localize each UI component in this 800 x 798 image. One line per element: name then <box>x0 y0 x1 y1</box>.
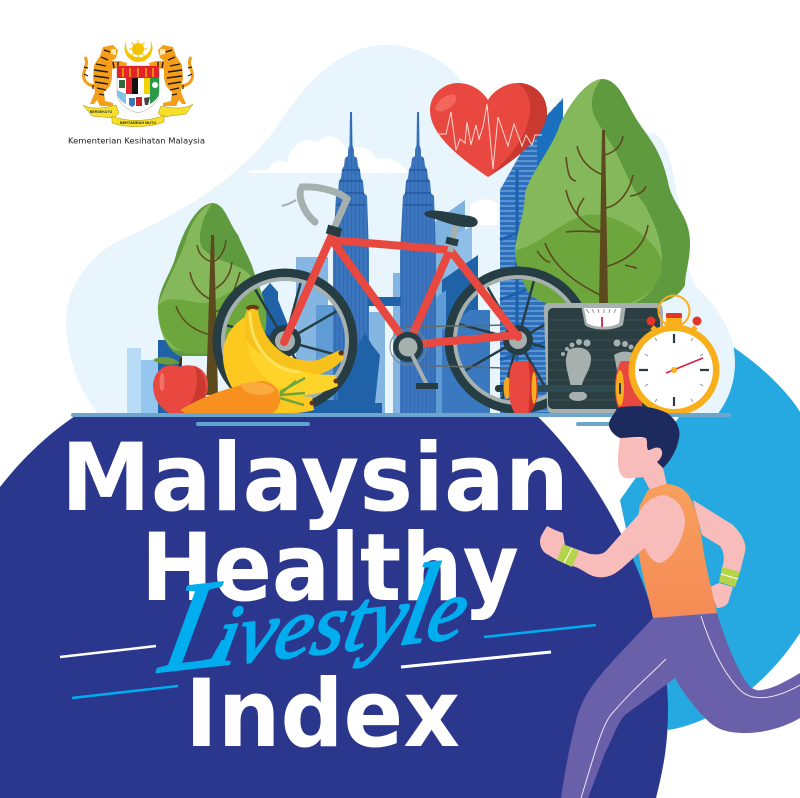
title: Healthy: Healthy <box>141 514 519 623</box>
front arm and hand <box>540 495 685 577</box>
stopwatch <box>628 296 720 416</box>
back arm <box>693 500 746 572</box>
left footprint <box>561 339 591 401</box>
rear wheel <box>443 265 593 415</box>
speed line white left <box>60 646 156 657</box>
neck and face <box>618 438 667 490</box>
title: Livestyle script: Livestyle <box>150 523 484 700</box>
front wheel <box>212 268 358 414</box>
background: pale blue blob <box>66 45 735 415</box>
Petronas tower left <box>333 112 369 413</box>
crest: motto ribbon <box>83 104 193 127</box>
navy title panel <box>0 416 668 798</box>
front wristband <box>557 544 579 567</box>
crank and pedal <box>390 329 438 389</box>
logo: Malaysian coat of arms with ministry name <box>68 40 205 146</box>
saddle <box>424 211 478 252</box>
title: Index: Index <box>185 660 460 769</box>
historic domed building <box>158 283 382 414</box>
trousers <box>561 613 800 798</box>
runner <box>540 406 800 798</box>
right footprint <box>614 340 640 385</box>
skyscraper <box>500 98 563 414</box>
tree right <box>515 79 690 310</box>
back wristband <box>719 567 740 587</box>
background: cyan circle <box>620 345 800 730</box>
crest: shield <box>117 66 159 113</box>
speed line cyan left <box>72 686 178 698</box>
city skyline <box>127 98 563 414</box>
ground shadow right <box>576 422 620 426</box>
back hand <box>710 583 733 608</box>
speed line white right <box>401 652 551 667</box>
carrot <box>180 378 305 415</box>
ground line <box>71 413 731 417</box>
crest: right tiger <box>149 45 192 106</box>
apple <box>153 357 208 415</box>
crest: left tiger <box>84 45 127 106</box>
crest: motto ribbon: BERSEKUTU <box>90 110 113 114</box>
bicycle <box>212 187 593 415</box>
dumbbell <box>495 361 643 415</box>
light buildings <box>127 257 402 414</box>
mid-rise buildings <box>433 200 490 414</box>
hair <box>609 406 680 468</box>
ministry name: Kementerian Kesihatan Malaysia <box>68 136 205 146</box>
ground shadow left <box>196 422 310 426</box>
speed line cyan right <box>484 625 596 637</box>
frame <box>284 235 518 345</box>
bathroom scale <box>544 303 663 413</box>
scale dial <box>581 305 626 330</box>
orange tank top <box>638 484 717 618</box>
title: Malaysian: Malaysian <box>61 424 569 533</box>
handlebar <box>282 187 347 233</box>
Petronas tower right <box>400 112 436 413</box>
skybridge <box>368 297 401 306</box>
clouds <box>245 136 498 225</box>
tree left <box>158 203 266 395</box>
chain <box>405 325 512 368</box>
heart with ECG line <box>430 83 547 177</box>
crest: crescent and sun <box>125 40 153 62</box>
bananas <box>223 307 344 414</box>
crest: motto ribbon: BERTAMBAH MUTU <box>120 121 156 125</box>
